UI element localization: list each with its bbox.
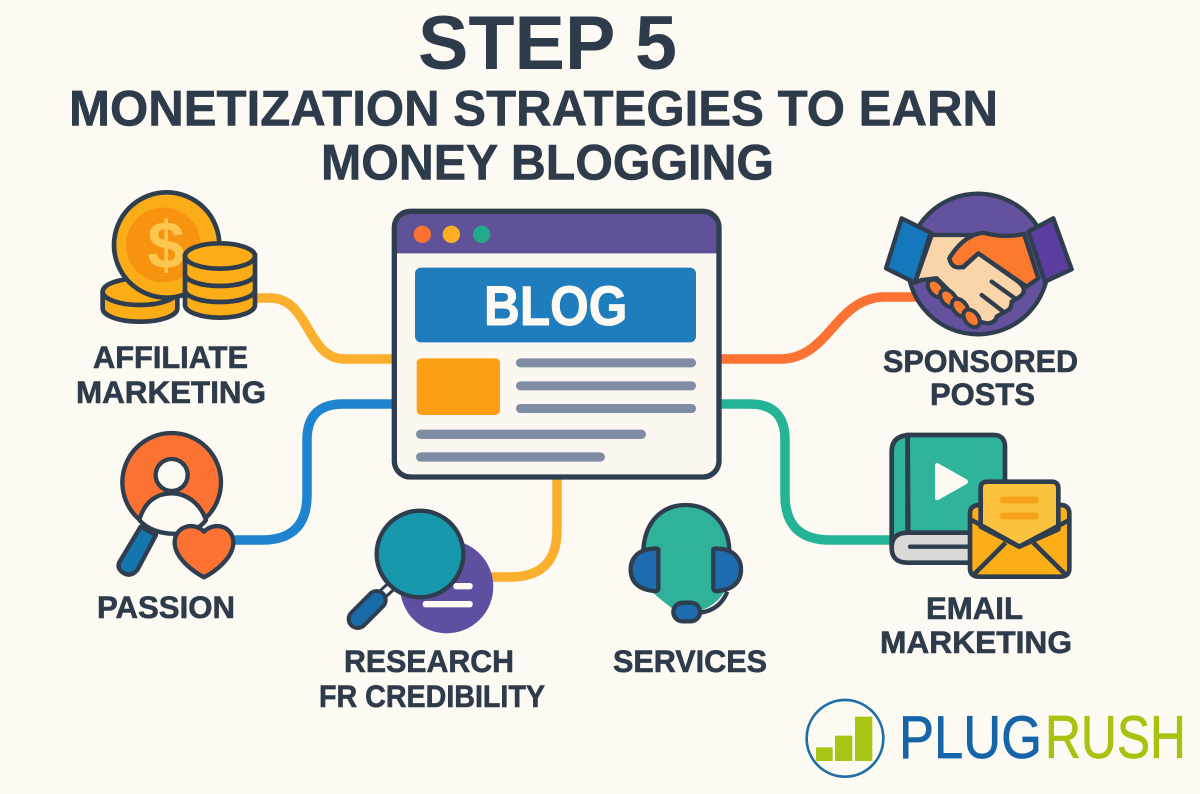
window dots xyxy=(414,226,490,243)
blog banner: BLOG xyxy=(484,275,627,337)
icon: research xyxy=(358,511,493,633)
connector: email marketing xyxy=(720,404,892,540)
label: sponsored posts: SPONSORED xyxy=(883,343,1078,379)
label: sponsored posts xyxy=(883,343,1078,412)
icon: handshake xyxy=(886,194,1072,334)
blog banner xyxy=(415,268,696,342)
connector: research xyxy=(490,476,557,577)
text lines xyxy=(416,358,696,462)
title: STEP 5 xyxy=(418,1,677,86)
logo wordmark xyxy=(899,704,1186,771)
title xyxy=(69,1,998,190)
label: affiliate marketing: AFFILIATE xyxy=(93,339,248,375)
label: email marketing: EMAIL xyxy=(926,590,1023,626)
label: email marketing: MARKETING xyxy=(880,624,1072,660)
panel: blog window xyxy=(394,211,719,477)
logo: plugrush xyxy=(807,700,1186,777)
title: MONETIZATION STRATEGIES TO EARN xyxy=(69,80,998,136)
label: research: FR CREDIBILITY xyxy=(319,678,545,714)
logo mark xyxy=(807,700,883,777)
icon: coins xyxy=(103,192,255,322)
label: research: RESEARCH xyxy=(344,643,514,679)
label: affiliate marketing: MARKETING xyxy=(76,374,266,410)
image placeholder xyxy=(417,358,500,415)
connector: sponsored posts xyxy=(720,297,920,359)
icon: services headset xyxy=(631,505,741,621)
logo wordmark: PLUG xyxy=(899,704,1042,771)
label: services: SERVICES xyxy=(613,643,767,679)
connector: affiliate marketing xyxy=(256,298,394,359)
icon: coins: $ xyxy=(147,209,185,283)
icon: passion xyxy=(119,433,233,577)
title: MONEY BLOGGING xyxy=(321,134,774,190)
label: email marketing xyxy=(880,590,1072,660)
connector: passion xyxy=(232,404,394,540)
label: passion: PASSION xyxy=(97,589,235,625)
label: affiliate marketing xyxy=(76,339,266,410)
icon: book and envelope xyxy=(892,435,1069,577)
label: sponsored posts: POSTS xyxy=(930,376,1035,412)
label: research xyxy=(319,643,545,714)
